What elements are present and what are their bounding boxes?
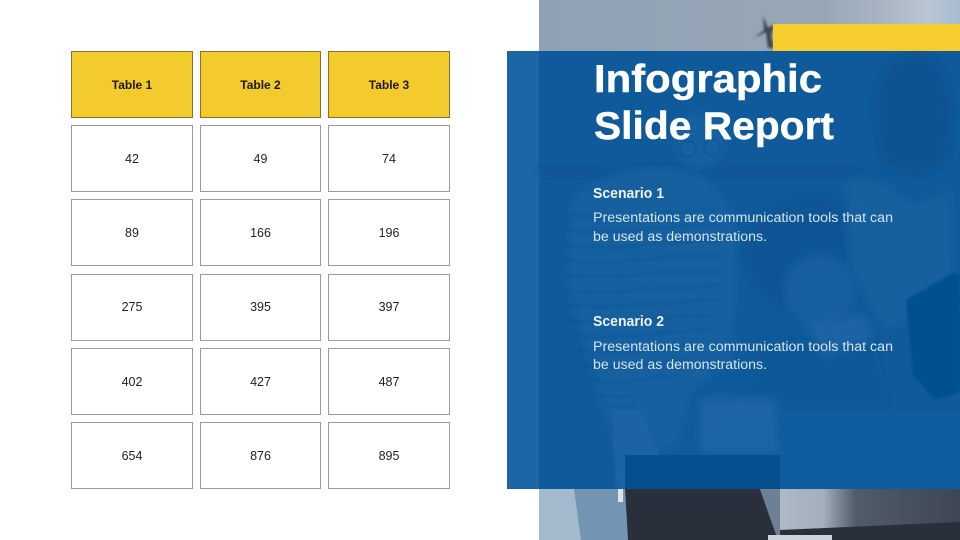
text block: scenario 1 [593,185,893,244]
table row 4: 402 [122,375,142,389]
muted person right [845,52,960,400]
table row 4 [72,348,450,414]
text block: scenario 2: be used as demonstrations. [593,357,767,372]
table row 3 [72,274,450,340]
muted person left [564,112,737,489]
muted hand [612,410,660,489]
table row 2: 89 [125,226,139,240]
table row 2: 166 [250,226,271,240]
table row 5: 895 [379,449,399,463]
table row 2 [72,200,450,266]
table header row: Table 1 [112,78,153,92]
laptop wedge [760,489,780,537]
table row 1: 74 [382,152,396,166]
table header row: Table 3 [369,78,410,92]
table header row: Table 2 [240,78,281,92]
table row 3: 395 [250,300,271,314]
muted head and glasses [678,116,722,164]
text block: scenario 2: Scenario 2 [593,313,664,330]
muted person centre [700,297,875,453]
muted shelf band [538,167,539,175]
dark laptop [625,489,778,540]
text block: scenario 2 [593,313,893,372]
title: Infographic [594,58,822,101]
light laptop [768,489,960,540]
blue translucent panel with muted figures [507,51,960,489]
yellow accent bar [773,24,960,51]
table row 5: 876 [250,449,271,463]
jeans [574,489,628,540]
table row 5 [72,422,450,488]
hand cuff [618,489,623,502]
table row 1: 49 [254,152,267,166]
table row 5: 654 [122,449,142,463]
table row 1 [72,126,450,192]
background photo: visible wall and desk [539,0,960,540]
icon: plant [754,16,774,48]
table row 4: 487 [379,375,399,389]
floor [539,489,639,540]
table row 1: 42 [125,152,139,166]
table row 2: 196 [379,226,399,240]
muted dark laptop [625,455,780,489]
data table [72,52,450,488]
text block: scenario 2: Presentations are communication tools that can [593,339,893,354]
table row 3: 275 [122,300,142,314]
title [594,58,834,148]
text block: scenario 1: Scenario 1 [593,185,664,202]
title: Slide Report [594,105,834,148]
table row 4: 427 [250,375,271,389]
muted light laptop [780,410,960,489]
text block: scenario 1: Presentations are communication tools that can [593,210,893,225]
text block: scenario 1: be used as demonstrations. [593,229,767,244]
table row 3: 397 [379,300,399,314]
table header row [72,52,450,118]
